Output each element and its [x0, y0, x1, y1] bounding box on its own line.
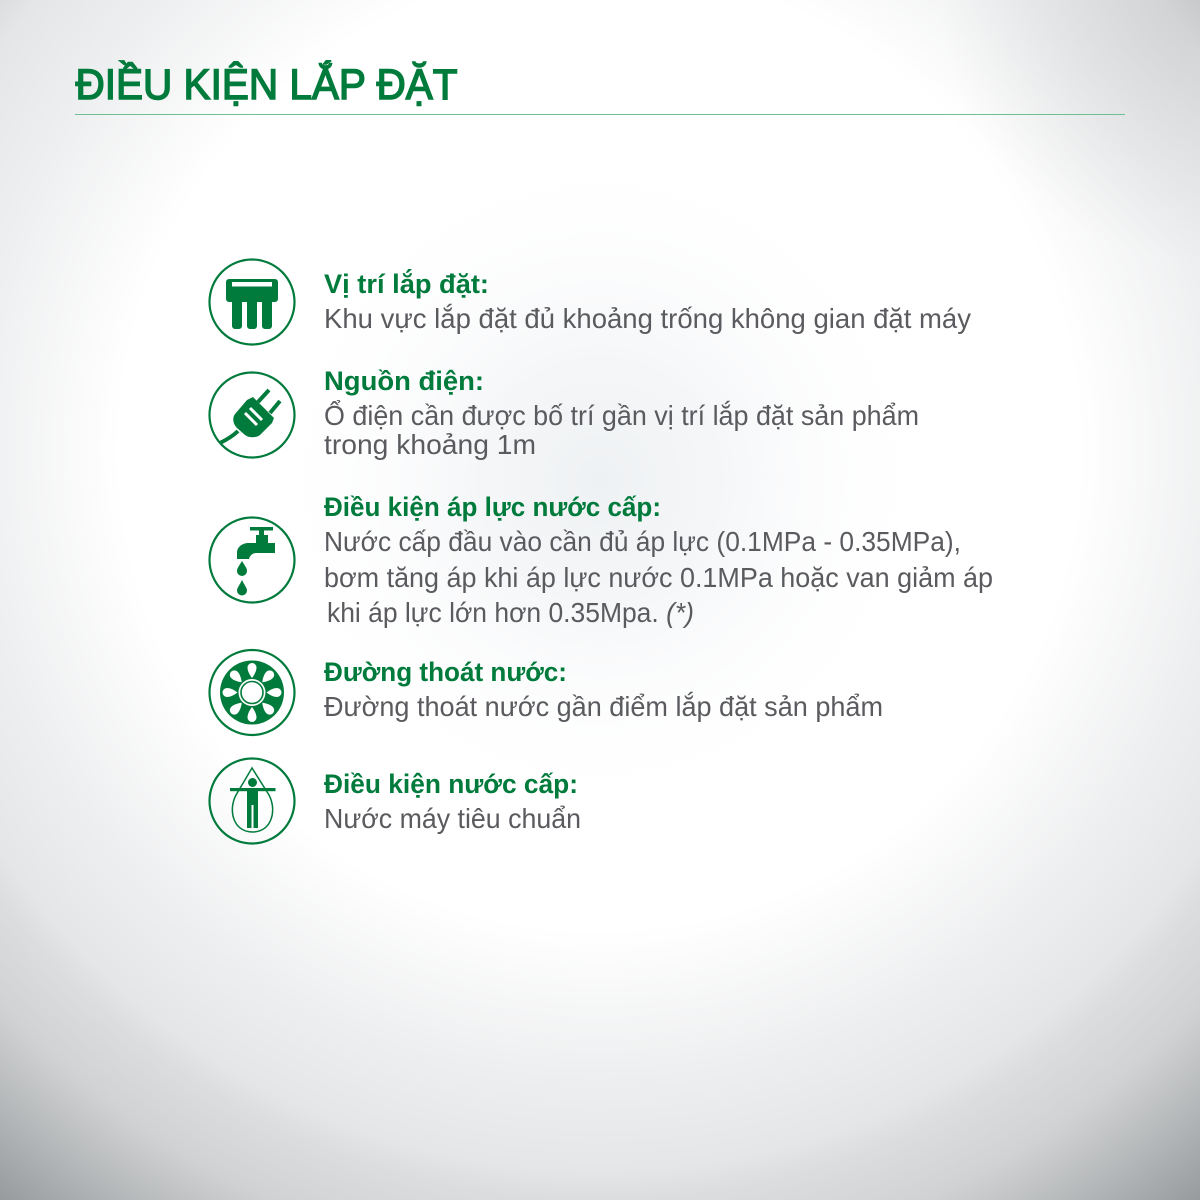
item: power source: trong khoảng 1m	[324, 429, 536, 460]
text: pressure: Nước cấp đầu vào cần đủ áp lực (0.1MPa - 0.35MPa),	[324, 526, 961, 557]
icon: filter unit	[210, 260, 294, 344]
text: drainage: Đường thoát nước gần điểm lắp đặt sản phẩm	[324, 691, 883, 722]
heading: power: Nguồn điện:	[324, 366, 484, 396]
icon: faucet	[210, 518, 294, 602]
item: water pressure	[210, 492, 993, 628]
heading: water supply: Điều kiện nước cấp:	[324, 769, 578, 799]
text: location: Khu vực lắp đặt đủ khoảng trống không gian đặt máy	[324, 303, 971, 334]
item: drainage	[210, 650, 883, 735]
icon: drainage wheel	[210, 650, 294, 735]
icon: plug	[210, 372, 294, 458]
item: power source	[210, 366, 919, 460]
item: water pressure: khi áp lực lớn hơn 0.35Mpa. (*)	[327, 597, 694, 628]
text: power: Ổ điện cần được bố trí gần vị trí lắp đặt sản phẩm	[324, 400, 919, 431]
title: ĐIỀU KIỆN LẮP ĐẶT	[76, 60, 458, 109]
item: installation location	[210, 260, 971, 344]
heading: location: Vị trí lắp đặt:	[324, 268, 489, 299]
icon: person in water drop	[210, 758, 294, 844]
heading: drainage: Đường thoát nước:	[324, 657, 567, 687]
heading: pressure: Điều kiện áp lực nước cấp:	[324, 492, 661, 522]
item: water pressure: bơm tăng áp khi áp lực nước 0.1MPa hoặc van giảm áp	[324, 562, 993, 593]
item: water supply	[210, 758, 581, 844]
text: water supply: Nước máy tiêu chuẩn	[324, 803, 581, 834]
